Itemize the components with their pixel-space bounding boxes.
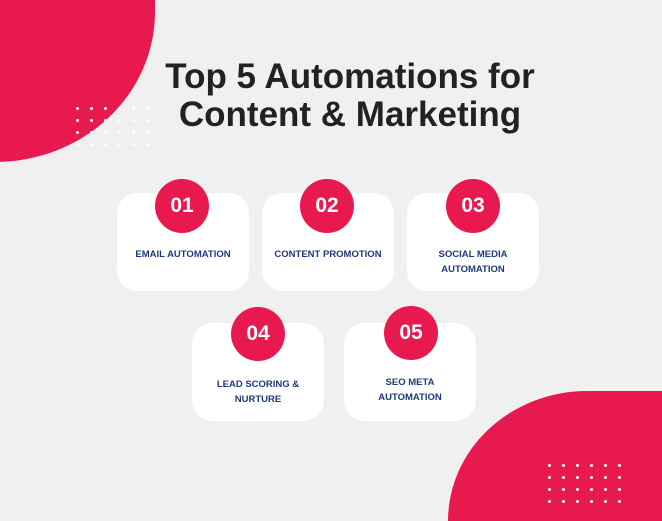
card 05: SEO META <box>386 377 434 388</box>
card 03: SOCIAL MEDIA <box>439 249 507 260</box>
card 04 <box>192 323 324 421</box>
card 03: 03 <box>461 194 485 217</box>
card 03: AUTOMATION <box>441 264 505 275</box>
card 03 <box>407 193 539 291</box>
card 04: 04 <box>246 322 270 345</box>
title: Top 5 Automations for <box>165 57 535 96</box>
card 05: 05 <box>399 321 423 344</box>
card 01: 01 <box>170 194 194 217</box>
card 05: AUTOMATION <box>378 392 442 403</box>
decorative shape: top-left <box>0 0 155 162</box>
dot grid bottom-right <box>548 464 621 503</box>
dot grid top-left <box>76 107 149 146</box>
card 02: CONTENT PROMOTION <box>274 249 382 260</box>
card 04: NURTURE <box>235 394 281 405</box>
title <box>165 57 535 134</box>
decorative shape: bottom-right <box>448 391 662 521</box>
card 01 <box>117 193 249 291</box>
card 04: LEAD SCORING & <box>217 379 299 390</box>
card 05 <box>344 323 476 421</box>
card 02: 02 <box>315 194 339 217</box>
card 01: EMAIL AUTOMATION <box>135 249 231 260</box>
title: Content & Marketing <box>179 95 521 134</box>
card 02 <box>262 193 394 291</box>
